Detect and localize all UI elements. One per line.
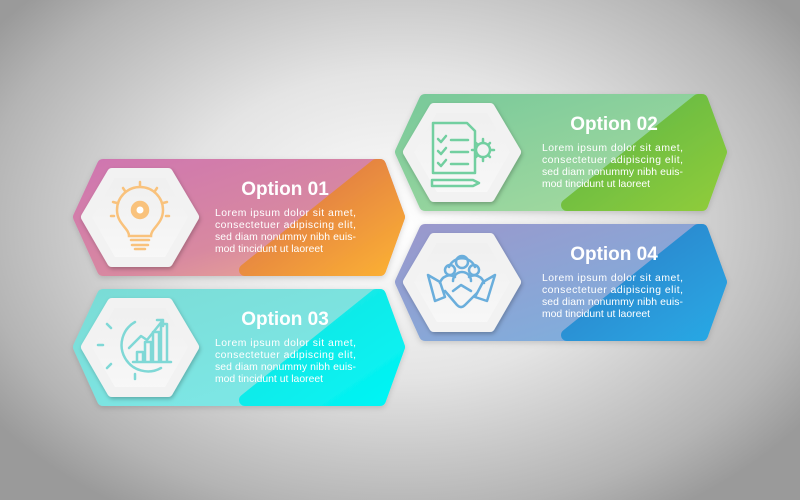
card: option 03 — [79, 295, 399, 400]
body text: consectetuer adipiscing elit, — [215, 220, 356, 231]
body text: mod tincidunt ut laoreet — [215, 374, 323, 385]
body text: mod tincidunt ut laoreet — [542, 309, 650, 320]
body text — [215, 208, 356, 255]
body text: Lorem ipsum dolor sit amet, — [215, 208, 356, 219]
body text: Lorem ipsum dolor sit amet, — [215, 338, 356, 349]
body text: mod tincidunt ut laoreet — [542, 179, 650, 190]
inner hexagon with icon: checklist document — [408, 108, 516, 197]
body text: consectetuer adipiscing elit, — [542, 285, 683, 296]
title: Option 04 — [570, 244, 658, 265]
body text: sed diam nonummy nibh euis- — [215, 232, 356, 243]
body text: consectetuer adipiscing elit, — [542, 155, 683, 166]
card: option 01 — [79, 165, 399, 270]
body text — [542, 273, 683, 320]
body text: mod tincidunt ut laoreet — [215, 244, 323, 255]
card: option 02 — [401, 100, 721, 205]
body text: sed diam nonummy nibh euis- — [215, 362, 356, 373]
body text — [542, 143, 683, 190]
title: Option 01 — [241, 179, 329, 200]
body text: sed diam nonummy nibh euis- — [542, 167, 683, 178]
inner hexagon with icon: lightbulb gear — [86, 173, 194, 262]
inner hexagon with icon: team handshake — [408, 238, 516, 327]
body text: Lorem ipsum dolor sit amet, — [542, 273, 683, 284]
inner hexagon with icon: gear chart — [86, 303, 194, 392]
title: Option 02 — [570, 114, 658, 135]
body text — [215, 338, 356, 385]
body text: Lorem ipsum dolor sit amet, — [542, 143, 683, 154]
card: option 04 — [401, 230, 721, 335]
body text: consectetuer adipiscing elit, — [215, 350, 356, 361]
body text: sed diam nonummy nibh euis- — [542, 297, 683, 308]
title: Option 03 — [241, 309, 329, 330]
